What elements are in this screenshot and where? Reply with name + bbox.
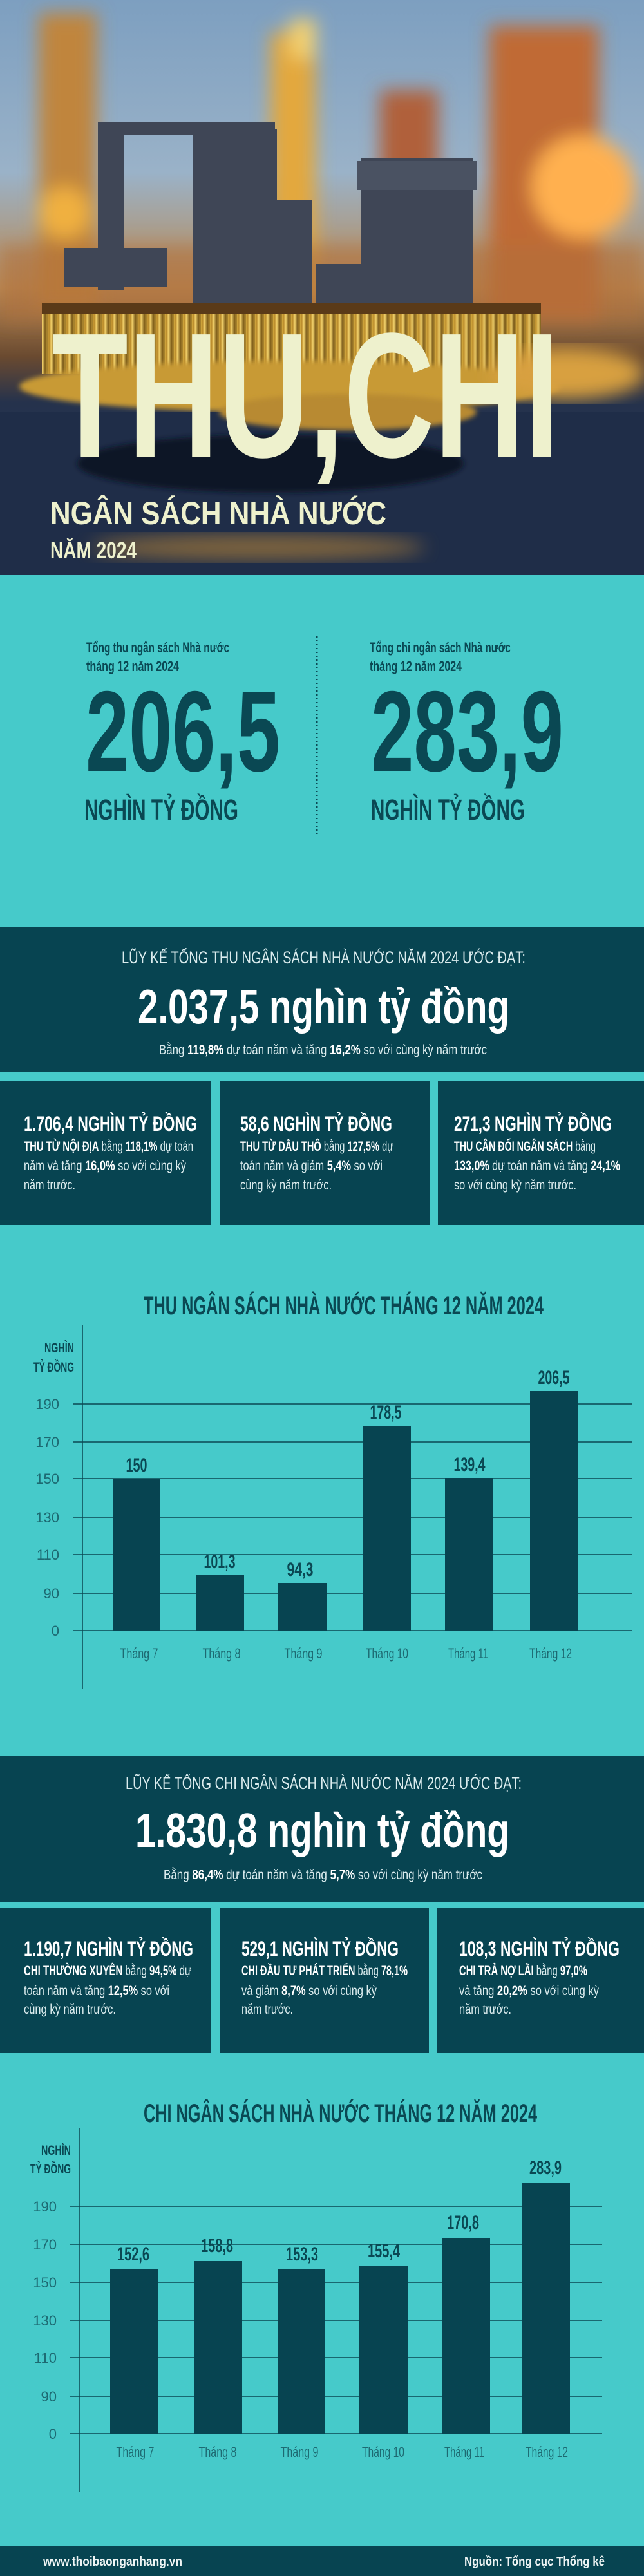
chart: chi tháng 12: 170 [33,2237,57,2253]
chart: thu tháng 12 [33,1291,632,1689]
stat: thu [84,639,280,826]
card: dầu thô: THU TỪ DẦU THÔ bằng 127,5% dự [240,1139,393,1154]
card: cân đối: THU CÂN ĐỐI NGÂN SÁCH bằng [454,1139,596,1154]
chart: chi tháng 12: 158,8 [201,2235,233,2257]
chart: chi tháng 12 [30,2098,602,2492]
chart: chi tháng 12: 150 [33,2275,57,2291]
chart: thu tháng 12: TỶ ĐỒNG [33,1359,74,1375]
chart: chi tháng 12: Tháng 9 [281,2444,318,2460]
card: cân đối: 133,0% dự toán năm và tăng 24,1% [454,1159,620,1173]
chart: thu tháng 12: 190 [35,1396,59,1412]
chart: chi tháng 12: Tháng 10 [362,2444,404,2460]
panel: lũy kế chi: 1.830,8 nghìn tỷ đồng [135,1803,509,1857]
chart: thu tháng 12: 178,5 [370,1402,402,1423]
stat: thu: tháng 12 năm 2024 [86,658,180,674]
card: thường xuyên: cùng kỳ năm trước. [24,2002,116,2017]
card: trả nợ lãi [459,1937,620,2017]
hero image [0,0,644,575]
chart: thu tháng 12: 94,3 [287,1559,313,1580]
stat: thu: Tổng thu ngân sách Nhà nước [86,639,229,656]
chart: chi tháng 12: TỶ ĐỒNG [30,2161,71,2177]
panel: lũy kế thu: 2.037,5 nghìn tỷ đồng [138,980,509,1034]
card: trả nợ lãi: năm trước. [459,2002,511,2017]
panel: thu cards [0,1081,644,1225]
chart: chi tháng 12: 110 [34,2350,57,2366]
card: nội địa: năm và tăng 16,0% so với cùng kỳ [24,1159,186,1173]
chart: thu tháng 12: 206,5 [538,1367,569,1388]
card: trả nợ lãi: CHI TRẢ NỢ LÃI bằng 97,0% [459,1964,587,1978]
card: thường xuyên [24,1937,193,2017]
card: dầu thô: toán năm và giảm 5,4% so với [240,1159,383,1173]
panel: lũy kế chi: Bằng 86,4% dự toán năm và tăng 5,7% so với cùng kỳ năm trước [164,1868,482,1882]
chart: thu tháng 12: Tháng 7 [120,1645,158,1662]
card: thường xuyên: 1.190,7 NGHÌN TỶ ĐỒNG [24,1937,193,1960]
chart: thu tháng 12: 130 [35,1510,59,1526]
chart: chi tháng 12: 130 [33,2313,57,2329]
chart: chi tháng 12: 155,4 [368,2240,400,2262]
chart: thu tháng 12: Tháng 11 [448,1645,488,1662]
chart: chi tháng 12: 170,8 [447,2212,479,2233]
year: NĂM 2024 [50,537,137,564]
chart: chi tháng 12: 0 [49,2426,57,2442]
chart: chi tháng 12: NGHÌN [41,2143,71,2158]
card: đầu tư [242,1937,408,2017]
footer: www.thoibaonganhang.vn [43,2555,182,2569]
chart: thu tháng 12: Tháng 9 [285,1645,322,1662]
chart: thu tháng 12: Tháng 12 [529,1645,572,1662]
panel: top stats [0,575,644,927]
chart: thu tháng 12: Tháng 10 [366,1645,408,1662]
stat: chi [370,639,564,826]
chart: thu tháng 12: Tháng 8 [202,1645,241,1662]
chart: thu tháng 12: 0 [52,1623,59,1639]
card: dầu thô [240,1112,393,1193]
chart: thu tháng 12: 139,4 [453,1454,486,1475]
card: nội địa [24,1112,197,1193]
card: dầu thô: 58,6 NGHÌN TỶ ĐỒNG [240,1112,392,1135]
card: đầu tư: CHI ĐẦU TƯ PHÁT TRIỂN bằng 78,1% [242,1964,408,1978]
card: dầu thô: cùng kỳ năm trước. [240,1178,332,1193]
stat: chi: tháng 12 năm 2024 [370,658,462,674]
chart: chi tháng 12: 283,9 [529,2157,562,2179]
chart: chi tháng 12: Tháng 7 [116,2444,155,2460]
stat: thu: 206,5 [86,667,280,795]
panel: lũy kế thu [0,927,644,1072]
card: nội địa: năm trước. [24,1178,75,1193]
chart: chi tháng 12: 190 [33,2199,57,2215]
chart: chi tháng 12: 153,3 [286,2244,318,2265]
chart: chi tháng 12: Tháng 11 [444,2444,484,2460]
stat: chi: NGHÌN TỶ ĐỒNG [371,793,525,826]
card: đầu tư: và giảm 8,7% so với cùng kỳ [242,1984,377,1998]
subtitle: NGÂN SÁCH NHÀ NƯỚC [50,495,386,531]
chart: thu tháng 12: NGHÌN [44,1341,74,1356]
panel: lũy kế thu: Bằng 119,8% dự toán năm và tăng 16,2% so với cùng kỳ năm trước [159,1043,487,1057]
card: đầu tư: 529,1 NGHÌN TỶ ĐỒNG [242,1937,399,1960]
chart: thu tháng 12: 110 [37,1547,59,1563]
chart: chi tháng 12: Tháng 8 [198,2444,237,2460]
footer: Nguồn: Tổng cục Thống kê [464,2555,605,2569]
chart: thu tháng 12: 150 [35,1471,59,1487]
chart: thu tháng 12: 90 [44,1586,59,1602]
chart: chi tháng 12: 152,6 [117,2244,149,2265]
panel: chi cards [0,1908,644,2053]
card: nội địa: THU TỪ NỘI ĐỊA bằng 118,1% dự toán [24,1139,193,1154]
card: cân đối: so với cùng kỳ năm trước. [454,1178,576,1193]
chart: chi tháng 12: Tháng 12 [526,2444,568,2460]
card: trả nợ lãi: và tăng 20,2% so với cùng kỳ [459,1984,599,1998]
panel: lũy kế chi [0,1756,644,1902]
card: thường xuyên: toán năm và tăng 12,5% so với [24,1984,169,1998]
card: đầu tư: năm trước. [242,2002,293,2017]
chart: thu tháng 12: 150 [126,1455,147,1476]
stat: thu: NGHÌN TỶ ĐỒNG [84,793,238,826]
card: thường xuyên: CHI THƯỜNG XUYÊN bằng 94,5% dự [24,1963,191,1978]
chart: thu tháng 12: 170 [35,1434,59,1450]
card: cân đối [454,1112,620,1193]
chart: chi tháng 12: 90 [41,2389,57,2405]
stat: chi: Tổng chi ngân sách Nhà nước [370,639,511,656]
card: nội địa: 1.706,4 NGHÌN TỶ ĐỒNG [24,1112,197,1135]
footer [0,2546,644,2576]
chart: thu tháng 12: 101,3 [204,1551,236,1573]
